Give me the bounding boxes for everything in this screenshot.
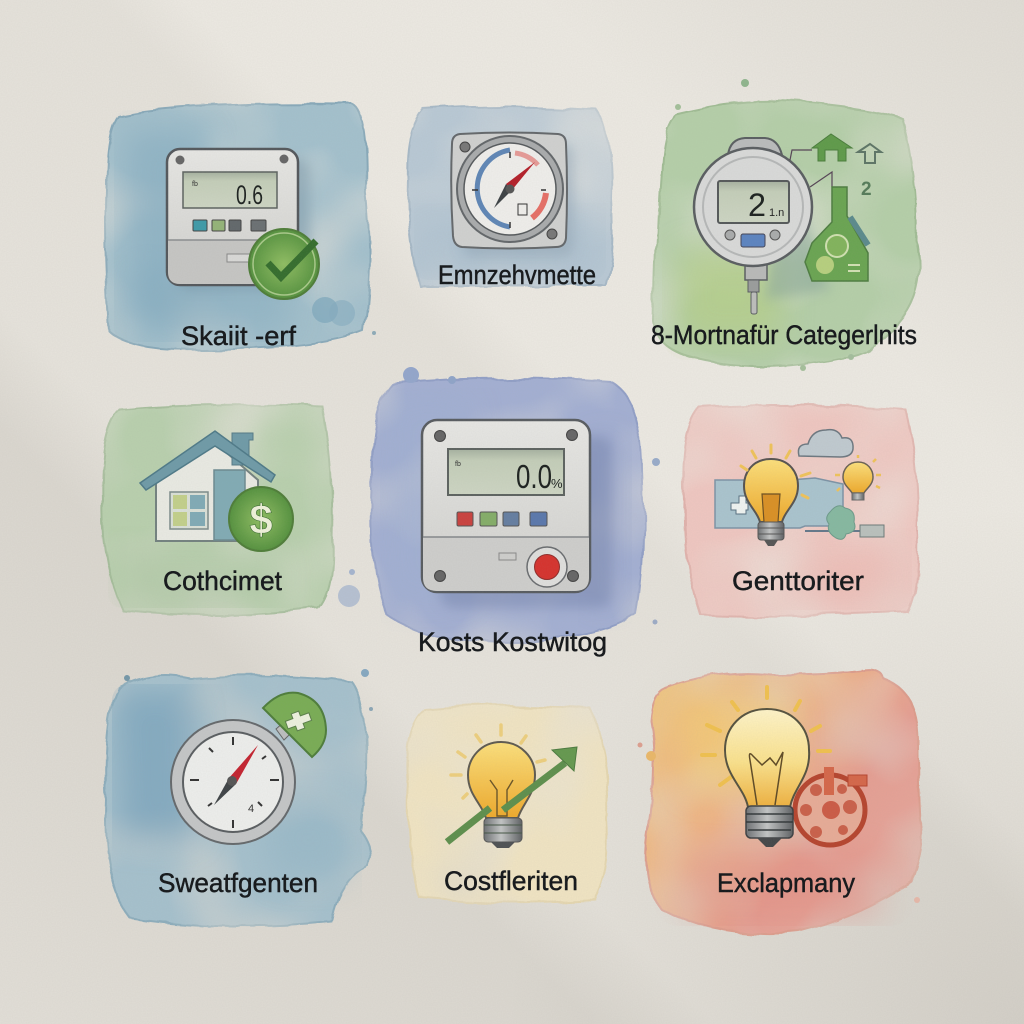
icon: green plus tag: [263, 693, 326, 757]
icon: green bush: [827, 506, 855, 539]
icon: bulb: [451, 725, 545, 848]
label: Kosts Kostwitog: [418, 627, 607, 657]
wash: blue: [106, 104, 370, 350]
icon: small bulb: [835, 455, 881, 500]
label: Emnzehvmette: [438, 260, 596, 290]
wash: orange to red: [646, 669, 923, 934]
icon: dollar coin: $: [249, 496, 273, 543]
wash: pink: [683, 405, 918, 616]
panel: stopwatch compass: [105, 669, 373, 926]
icon: compass: [171, 720, 295, 844]
panel: bulb with timer: [638, 669, 923, 934]
wash: sage green: [102, 405, 332, 615]
icon: green house: [790, 134, 852, 187]
wash: periwinkle: [371, 378, 643, 642]
icon: green arrow: [447, 763, 565, 842]
label: Costfleriten: [444, 866, 578, 896]
device: digital meter: fb: [455, 461, 461, 468]
panel: central meter: [338, 367, 660, 657]
device: digital meter: [422, 420, 612, 608]
arrow head: [552, 747, 577, 771]
icon: small house outline: [858, 144, 881, 163]
panel: gauge dial: [408, 107, 613, 290]
meter reading: 0.0: [516, 458, 552, 495]
device: digital meter: fb: [192, 181, 198, 188]
icon: dollar coin: [229, 487, 293, 551]
label: Genttoriter: [732, 566, 864, 596]
device: round gauge: [451, 132, 574, 257]
wash: steel blue: [105, 676, 370, 926]
device: digital meter: [167, 149, 310, 290]
icon: cloud: [798, 430, 853, 457]
panel: circular meter with green key: [651, 79, 919, 371]
gauge needle: [494, 162, 535, 208]
light rays: [702, 687, 830, 785]
panel: house and money: [102, 405, 332, 615]
icon: blue panel: [715, 478, 884, 537]
meter reading: 0.6: [236, 180, 263, 210]
panel: bulbs and cloud: [683, 405, 918, 616]
icon: green check badge: [249, 229, 319, 299]
panel: bulb with rising arrow: [407, 706, 609, 903]
label: Sweatfgenten: [158, 868, 318, 898]
red knob: [527, 547, 567, 587]
label: Exclapmany: [717, 868, 855, 898]
compass needle: [214, 745, 258, 805]
wash: green: [654, 101, 919, 367]
icon: large bulb: [741, 445, 810, 546]
icon: compass: 4: [248, 803, 254, 815]
icon: glowing bulb: [725, 709, 809, 847]
label: Cothcimet: [163, 566, 282, 596]
device: round digital meter: [694, 138, 830, 314]
device: digital meter: %: [551, 476, 563, 491]
label: Skaiit -erf: [181, 321, 296, 351]
device: round digital meter: 1.n: [769, 207, 784, 219]
panel: smart meter with check: [106, 104, 376, 351]
wash: pale yellow: [407, 706, 609, 903]
icon: green key device: [805, 187, 868, 281]
wash: grey blue: [408, 107, 613, 286]
number 2: 2: [861, 179, 872, 200]
meter reading: 2: [748, 187, 766, 223]
icon: red timer dial: [795, 767, 867, 845]
icon: house: [140, 431, 275, 541]
label: 8-Mortnafür Categerlnits: [651, 320, 917, 350]
